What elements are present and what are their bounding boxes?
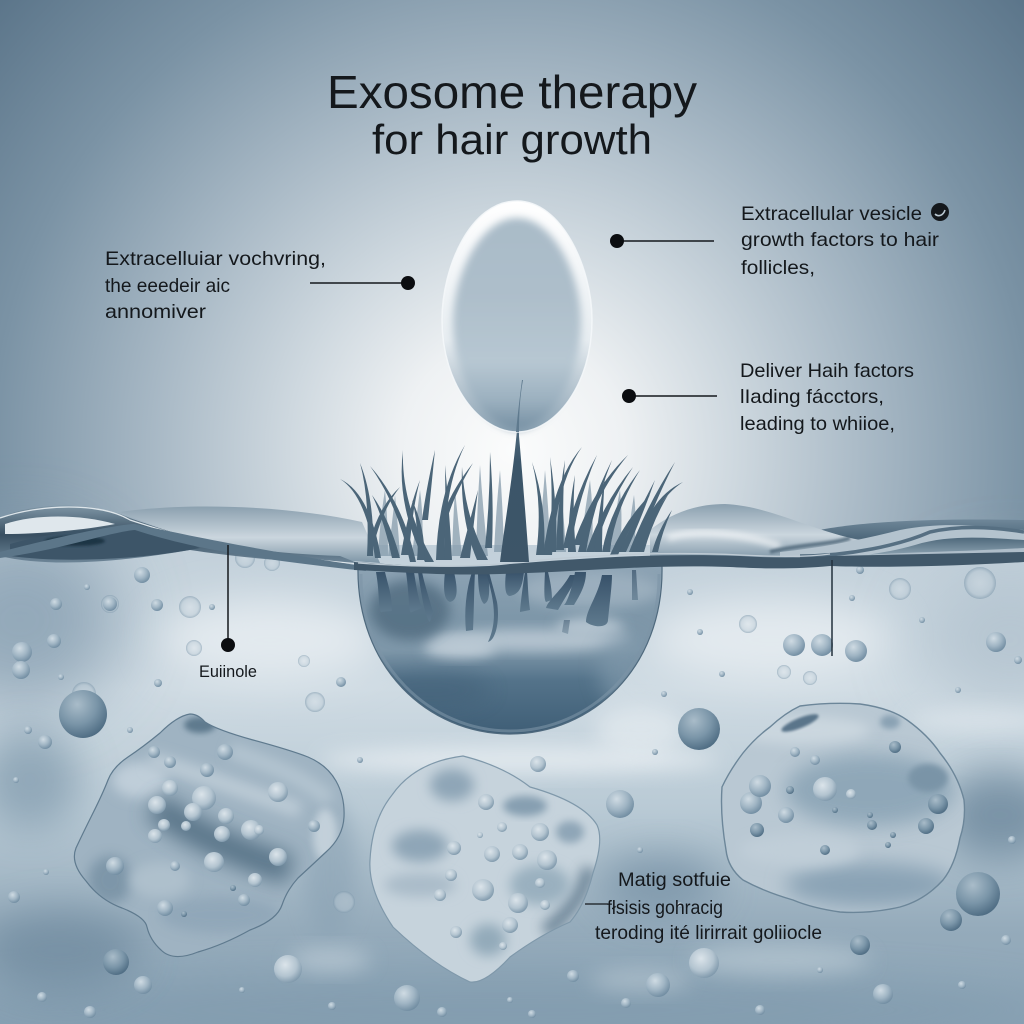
callout: upper right label: growth factors to hair: [741, 229, 940, 251]
leader: follicle label: [221, 545, 235, 652]
title: [327, 66, 697, 163]
callout: upper left label: [105, 248, 326, 323]
egg-shaped exosome vesicle: [442, 201, 592, 432]
callout: upper right label: follicles,: [741, 257, 815, 279]
background: underwater area: [0, 530, 1024, 1024]
callout: upper right label: Extracellular vesicle: [741, 203, 922, 225]
background: misty sky: [0, 0, 1024, 600]
callout: upper left label: annomiver: [105, 301, 207, 323]
callout: upper left label: Extracelluiar vochvring,: [105, 248, 326, 270]
hair strands above the surface: [340, 445, 683, 562]
callout: middle right label: Deliver Haih factors: [740, 360, 914, 382]
callout: lower label: [595, 869, 822, 944]
callout: lower label: teroding ité lirirrait goliiocle: [595, 922, 822, 944]
callout: middle right label: lIading fácctors,: [740, 386, 884, 408]
leader: lower callout: [585, 903, 608, 905]
cell: right blob: [722, 703, 964, 912]
large foreground bubbles: [59, 634, 1000, 916]
callout: upper right label: [741, 203, 940, 279]
callout: lower label: Matig sotfuie: [618, 869, 731, 891]
callout: upper left label: the eeedeir aic: [105, 275, 230, 297]
callout: lower label: fłsisis gohracig: [607, 897, 723, 919]
hair roots inside the dome: [376, 570, 638, 642]
label: follicle: Euiinole: [199, 662, 257, 681]
title: Exosome therapy: [327, 66, 697, 118]
callout: middle right label: leading to whiioe,: [740, 413, 895, 435]
small background bubbles: [8, 548, 1022, 1018]
title: for hair growth: [372, 116, 652, 163]
leader: upper left: [310, 276, 415, 290]
dome: hair follicle bowl: [358, 566, 662, 734]
central hair strand: [500, 380, 529, 562]
leader: middle right: [622, 389, 717, 403]
water surface ribbon: [0, 506, 1024, 575]
cell: middle blob: [370, 756, 600, 982]
right water swell behind the surface: [650, 504, 1024, 565]
leader: upper right: [610, 234, 714, 248]
left water swell behind the surface: [120, 506, 380, 563]
leader: right vertical: [831, 560, 833, 656]
callout: middle right label: [740, 360, 914, 435]
cell: left blob: [74, 714, 344, 957]
icon: small dot glyph: [931, 203, 949, 221]
